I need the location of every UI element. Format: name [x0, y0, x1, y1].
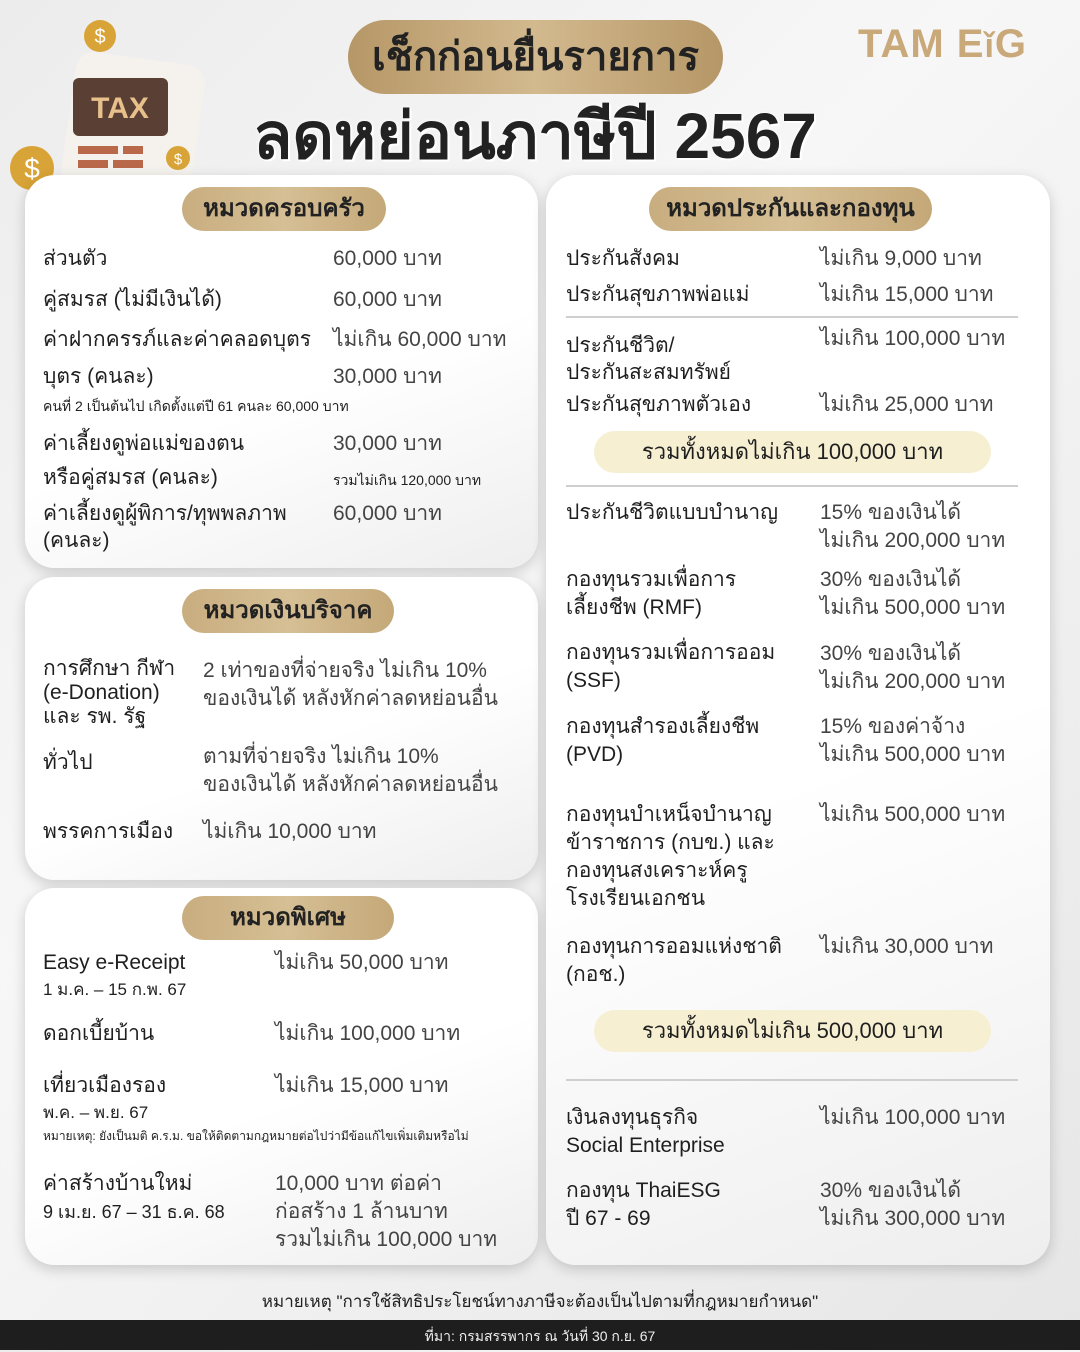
insurance rows: ประกันชีวิตแบบบำนาญ: [566, 501, 778, 524]
insurance rows: ไม่เกิน 500,000 บาท: [820, 596, 1005, 619]
family rows: ค่าเลี้ยงดูผู้พิการ/ทุพพลภาพ: [43, 502, 287, 525]
family rows: 30,000 บาท: [333, 432, 442, 455]
donation rows: 2 เท่าของที่จ่ายจริง ไม่เกิน 10%: [203, 659, 487, 682]
insurance rows: ไม่เกิน 300,000 บาท: [820, 1207, 1005, 1230]
family rows: หรือคู่สมรส (คนละ): [43, 466, 218, 489]
special rows: 9 เม.ย. 67 – 31 ธ.ค. 68: [43, 1202, 225, 1222]
insurance rows: ข้าราชการ (กบข.) และ: [566, 831, 775, 854]
heading: insurance and funds: [649, 187, 932, 231]
donation rows: การศึกษา กีฬา: [43, 657, 175, 680]
icon: tax document with coins: $: [174, 151, 183, 168]
panel: insurance and funds: [546, 175, 1050, 1265]
panel: donations: [25, 577, 538, 880]
family rows: ไม่เกิน 60,000 บาท: [333, 328, 507, 351]
heading: special: [182, 896, 394, 940]
insurance rows: กองทุนการออมแห่งชาติ: [566, 935, 782, 958]
family rows: ค่าเลี้ยงดูพ่อแม่ของตน: [43, 432, 244, 455]
special rows: ค่าสร้างบ้านใหม่: [43, 1172, 192, 1195]
panel: family: [25, 175, 538, 568]
donation rows: [43, 656, 498, 843]
icon: tax document with coins: [10, 20, 190, 190]
insurance rows: ไม่เกิน 200,000 บาท: [820, 670, 1005, 693]
insurance rows: 15% ของเงินได้: [820, 501, 961, 524]
insurance rows: (กอช.): [566, 963, 625, 986]
insurance rows: (SSF): [566, 669, 621, 692]
insurance rows: ไม่เกิน 500,000 บาท: [820, 803, 1005, 826]
insurance rows: ประกันสุขภาพพ่อแม่: [566, 283, 749, 306]
insurance rows: กองทุน ThaiESG: [566, 1179, 721, 1202]
insurance rows: [566, 246, 1018, 1230]
insurance rows: ไม่เกิน 9,000 บาท: [820, 247, 982, 270]
heading: donations: หมวดเงินบริจาค: [204, 597, 372, 624]
insurance rows: กองทุนรวมเพื่อการ: [566, 568, 736, 591]
footer: source: ที่มา: กรมสรรพากร ณ วันที่ 30 ก.ย. 67: [425, 1328, 655, 1344]
special rows: เที่ยวเมืองรอง: [43, 1074, 166, 1097]
insurance rows: เงินลงทุนธุรกิจ: [566, 1106, 698, 1129]
family rows: คู่สมรส (ไม่มีเงินได้): [43, 288, 222, 311]
insurance rows: Social Enterprise: [566, 1134, 725, 1157]
insurance rows: (PVD): [566, 743, 623, 766]
donation rows: (e-Donation): [43, 681, 160, 704]
panel: special: [25, 888, 538, 1265]
insurance rows: 15% ของค่าจ้าง: [820, 715, 965, 738]
insurance rows: กองทุนบำเหน็จบำนาญ: [566, 803, 772, 826]
icon: tax document with coins: $: [24, 153, 40, 184]
title pill: check before filing: [348, 20, 723, 94]
insurance rows: ปี 67 - 69: [566, 1207, 651, 1230]
heading: insurance and funds: หมวดประกันและกองทุน: [666, 195, 915, 222]
insurance rows: รวมทั้งหมดไม่เกิน 500,000 บาท: [642, 1018, 943, 1043]
insurance rows: ประกันสุขภาพตัวเอง: [566, 393, 751, 416]
donation rows: ของเงินได้ หลังหักค่าลดหย่อนอื่น: [203, 687, 498, 710]
special rows: ไม่เกิน 15,000 บาท: [275, 1074, 449, 1097]
insurance rows: ประกันชีวิต/: [566, 334, 674, 357]
insurance rows: ไม่เกิน 100,000 บาท: [820, 327, 1005, 350]
donation rows: ทั่วไป: [43, 751, 93, 774]
special rows: 1 ม.ค. – 15 ก.พ. 67: [43, 980, 186, 999]
footnote: หมายเหตุ "การใช้สิทธิประโยชน์ทางภาษีจะต้องเป็นไปตามที่กฎหมายกำหนด": [262, 1292, 818, 1311]
special rows: 10,000 บาท ต่อค่า: [275, 1172, 442, 1195]
family rows: บุตร (คนละ): [43, 365, 154, 388]
insurance rows: กองทุนรวมเพื่อการออม: [566, 641, 775, 664]
icon: tax document with coins: TAX: [91, 92, 149, 125]
insurance rows: ประกันสะสมทรัพย์: [566, 361, 731, 384]
special rows: พ.ค. – พ.ย. 67: [43, 1103, 148, 1122]
donation rows: ไม่เกิน 10,000 บาท: [203, 820, 377, 843]
heading: family: หมวดครอบครัว: [203, 195, 365, 222]
insurance rows: ไม่เกิน 500,000 บาท: [820, 743, 1005, 766]
family rows: ค่าฝากครรภ์และค่าคลอดบุตร: [43, 328, 311, 351]
special rows: ไม่เกิน 50,000 บาท: [275, 951, 449, 974]
insurance rows: ไม่เกิน 25,000 บาท: [820, 393, 994, 416]
insurance rows: 30% ของเงินได้: [820, 642, 961, 665]
donation rows: และ รพ. รัฐ: [43, 705, 146, 728]
donation rows: ตามที่จ่ายจริง ไม่เกิน 10%: [203, 745, 439, 768]
title: tax deductions 2567: ลดหย่อนภาษีปี 2567: [253, 100, 817, 172]
special rows: ดอกเบี้ยบ้าน: [43, 1022, 154, 1045]
insurance rows: ไม่เกิน 15,000 บาท: [820, 283, 994, 306]
special rows: รวมไม่เกิน 100,000 บาท: [275, 1228, 497, 1251]
special rows: [43, 950, 497, 1251]
footer: source: [0, 1320, 1080, 1350]
donation rows: พรรคการเมือง: [43, 820, 173, 843]
insurance rows: รวมทั้งหมดไม่เกิน 100,000 บาท: [642, 439, 943, 464]
heading: donations: [182, 589, 394, 633]
insurance rows: กองทุนสงเคราะห์ครู: [566, 859, 748, 882]
special rows: ไม่เกิน 100,000 บาท: [275, 1022, 460, 1045]
heading: family: [182, 187, 386, 231]
insurance rows: โรงเรียนเอกชน: [566, 887, 705, 910]
insurance rows: ประกันสังคม: [566, 247, 680, 270]
insurance rows: 30% ของเงินได้: [820, 1179, 961, 1202]
insurance rows: 30% ของเงินได้: [820, 568, 961, 591]
family rows: (คนละ): [43, 529, 110, 552]
insurance rows: ไม่เกิน 200,000 บาท: [820, 529, 1005, 552]
family rows: 60,000 บาท: [333, 288, 442, 311]
heading: special: หมวดพิเศษ: [230, 904, 346, 931]
family rows: ส่วนตัว: [43, 247, 107, 270]
insurance rows: กองทุนสำรองเลี้ยงชีพ: [566, 715, 759, 738]
family rows: คนที่ 2 เป็นต้นไป เกิดตั้งแต่ปี 61 คนละ 60,000 บาท: [43, 398, 349, 414]
special rows: ก่อสร้าง 1 ล้านบาท: [275, 1200, 448, 1223]
icon: tax document with coins: $: [94, 26, 106, 48]
logo: TAM EǐG: [858, 22, 1027, 66]
family rows: 60,000 บาท: [333, 502, 442, 525]
insurance rows: ไม่เกิน 100,000 บาท: [820, 1106, 1005, 1129]
family rows: รวมไม่เกิน 120,000 บาท: [333, 472, 481, 488]
family rows: 60,000 บาท: [333, 247, 442, 270]
family rows: [43, 247, 507, 552]
donation rows: ของเงินได้ หลังหักค่าลดหย่อนอื่น: [203, 773, 498, 796]
insurance rows: เลี้ยงชีพ (RMF): [566, 596, 702, 619]
family rows: 30,000 บาท: [333, 365, 442, 388]
special rows: หมายเหตุ: ยังเป็นมติ ค.ร.ม. ขอให้ติดตามกฎหมายต่อไปว่ามีข้อแก้ไขเพิ่มเติมหรือไม่: [43, 1129, 469, 1143]
special rows: Easy e-Receipt: [43, 951, 185, 974]
insurance rows: ไม่เกิน 30,000 บาท: [820, 935, 994, 958]
title pill: check before filing: เช็กก่อนยื่นรายการ: [372, 35, 699, 79]
